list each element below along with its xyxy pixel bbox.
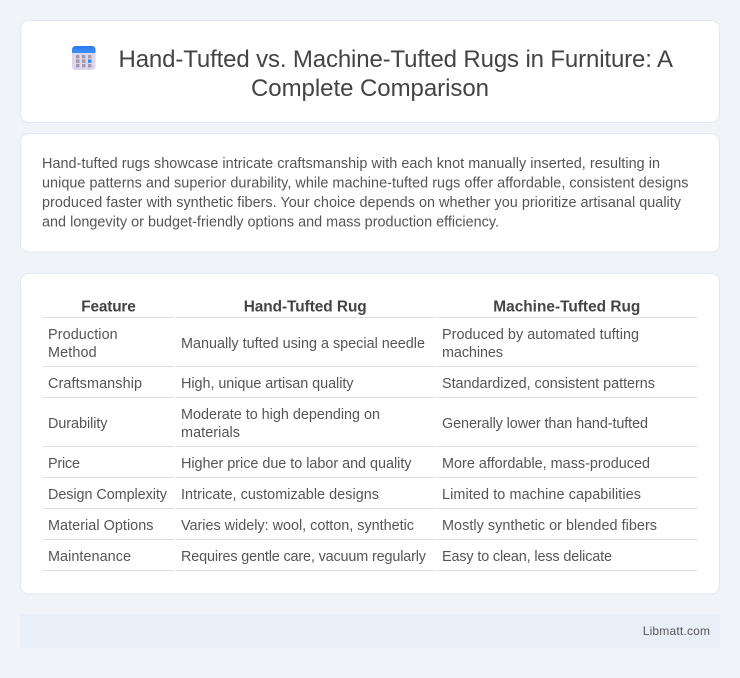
table header row: Machine-Tufted Rug [493,298,640,316]
table row: design complexity: Intricate, customizable designs [181,487,379,503]
table row: durability: materials [181,425,240,441]
title: Hand-Tufted vs. Machine-Tufted Rugs in Furniture: A [118,46,673,73]
table row: material options: Mostly synthetic or blended fibers [442,518,657,534]
text block: introduction paragraph: unique patterns and superior durability, while machine-tufted rugs offer affordable, consistent designs [42,176,688,192]
table row: durability: Moderate to high depending on [181,407,380,423]
table row: maintenance: Easy to clean, less delicate [442,549,612,565]
table row: maintenance: Maintenance [48,549,131,565]
table row: craftsmanship: Standardized, consistent patterns [442,376,655,392]
table row: production method: Method [48,345,97,361]
table row: price [43,456,697,478]
table header row: Feature [81,298,136,316]
table row: price: Higher price due to labor and quality [181,456,412,472]
table row: design complexity: Design Complexity [48,487,168,503]
text block: introduction paragraph: and longevity or budget-friendly options and mass production efficiency. [42,214,499,230]
table row: production method: machines [442,345,503,361]
table row: durability: Generally lower than hand-tufted [442,416,648,432]
text block: introduction paragraph [42,156,688,230]
title: Complete Comparison [251,75,489,102]
table row: production method: Production [48,327,118,343]
table row: craftsmanship: Craftsmanship [48,376,142,392]
footer bar [20,614,720,648]
table row: material options: Varies widely: wool, cotton, synthetic [181,518,414,534]
table row: production method: Manually tufted using a special needle [181,336,425,352]
table row: production method: Produced by automated tufting [442,327,639,343]
panel: introduction [20,134,720,252]
footer text: Libmatt.com: Libmatt.com [643,624,710,638]
table row: craftsmanship [43,376,697,398]
panel: comparison table [20,274,720,594]
table row: durability [43,407,697,447]
table header row [43,298,697,318]
table row: production method [43,327,697,367]
table row: design complexity: Limited to machine capabilities [442,487,641,503]
table row: price: More affordable, mass-produced [442,456,650,472]
table row: material options [43,518,697,540]
text block: introduction paragraph: Hand-tufted rugs showcase intricate craftsmanship with each knot manually inserted, resulting in [42,156,660,172]
table row: price: Price [48,456,80,472]
table row: maintenance: Requires gentle care, vacuum regularly [181,549,427,565]
table row: maintenance [43,549,697,571]
table row: design complexity [43,487,697,509]
table row: craftsmanship: High, unique artisan quality [181,376,354,392]
title [118,46,673,102]
table header row: Hand-Tufted Rug [244,298,367,316]
panel: title header [20,20,720,122]
table row: durability: Durability [48,416,108,432]
table row: material options: Material Options [48,518,154,534]
icon: calendar [72,46,96,70]
text block: introduction paragraph: produced faster with synthetic fibers. Your choice depends on whether you prioritize artisanal quality [42,195,682,211]
